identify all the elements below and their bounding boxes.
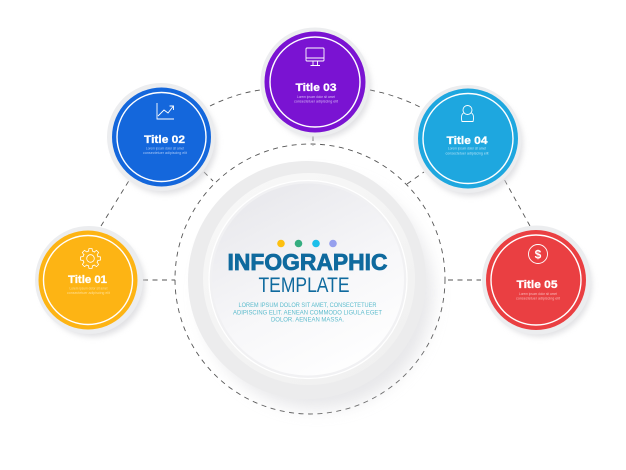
caption xyxy=(143,146,188,155)
icon: dollar coin: $ xyxy=(535,248,542,262)
icon: monitor xyxy=(306,48,324,66)
title: Title 01 xyxy=(68,274,107,286)
caption: Lorem ipsum dolor sit amet xyxy=(448,146,487,150)
caption: Lorem ipsum dolor sit amet xyxy=(297,94,336,99)
body text: LOREM IPSUM DOLOR SIT AMET, CONSECTETUER xyxy=(238,302,377,309)
caption xyxy=(67,286,111,295)
panel: title 05 xyxy=(482,226,592,337)
panel: title 03 xyxy=(260,28,371,139)
heading: infographic: INFOGRAPHIC xyxy=(228,249,388,275)
caption: consectetuer adipiscing elit xyxy=(143,150,188,155)
title: Title 05 xyxy=(516,279,558,291)
caption xyxy=(516,291,561,300)
body text: ADIPISCING ELIT. AENEAN COMMODO LIGULA EGET xyxy=(233,310,382,316)
caption xyxy=(294,94,339,104)
caption xyxy=(446,146,489,156)
central plate xyxy=(188,161,433,409)
heading: template: TEMPLATE xyxy=(258,274,350,297)
panel: title 01 xyxy=(35,226,145,337)
title: Title 03 xyxy=(296,82,336,94)
caption: Lorem ipsum dolor sit amet xyxy=(519,291,558,296)
body text: DOLOR. AENEAN MASSA. xyxy=(271,316,344,324)
body text xyxy=(233,302,382,324)
title: Title 02 xyxy=(144,134,185,146)
dashed connectors xyxy=(101,90,530,414)
panel: title 02 xyxy=(107,83,217,194)
caption: Lorem ipsum dolor sit amet xyxy=(146,146,185,150)
title: Title 04 xyxy=(446,135,488,147)
panel: title 04 xyxy=(414,85,523,196)
caption: consectetuer adipiscing elit xyxy=(446,150,489,156)
icon: line chart xyxy=(157,103,174,119)
decorative dots xyxy=(277,240,337,247)
icon: person xyxy=(461,106,474,122)
caption: consectetuer adipiscing elit xyxy=(67,290,111,295)
caption: Lorem ipsum dolor sit amet xyxy=(70,286,108,290)
caption: consectetuer adipiscing elit xyxy=(516,296,561,300)
icon: gear xyxy=(80,248,100,268)
caption: consectetuer adipiscing elit xyxy=(294,98,339,104)
